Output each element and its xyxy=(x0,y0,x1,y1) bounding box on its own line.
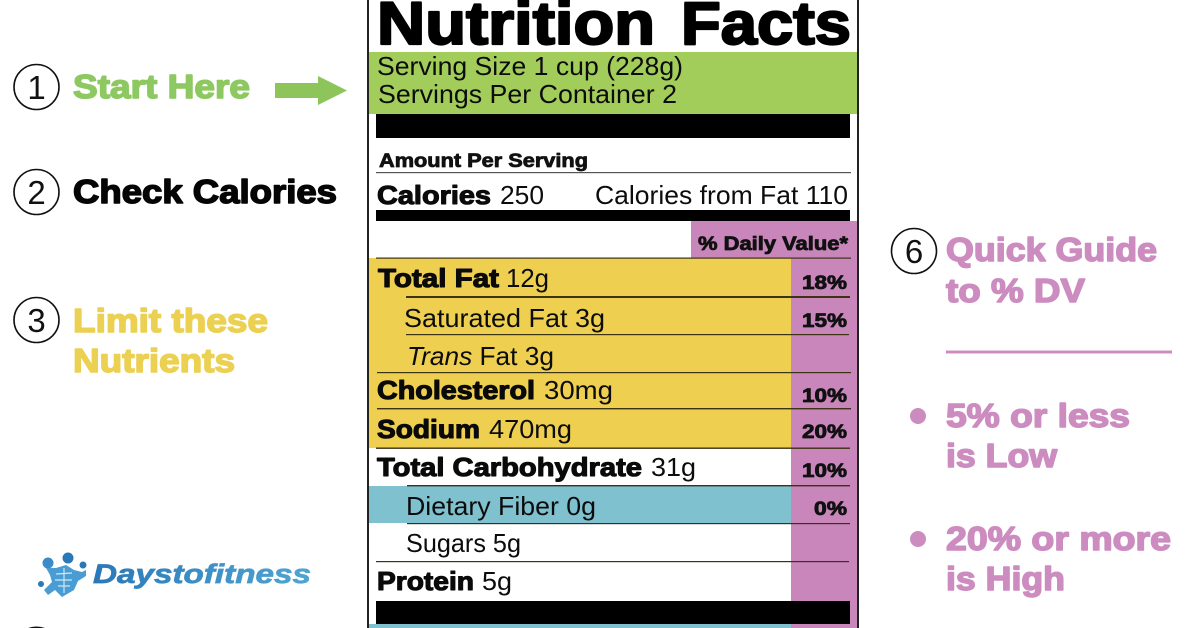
step 3: limit these nutrients: Nutrients xyxy=(73,342,235,379)
vitamin band xyxy=(369,624,791,628)
thick divider xyxy=(376,114,850,138)
fiber band xyxy=(369,486,791,523)
step 1: start here xyxy=(14,64,250,110)
low guidance: 5% or less xyxy=(946,397,1130,434)
quick guide heading: Quick Guide xyxy=(946,231,1157,268)
logo: daystofitness: Daystofitness xyxy=(93,559,311,589)
nutrient rows xyxy=(377,263,696,596)
nutrient rows: Total Carbohydrate xyxy=(377,452,642,482)
step 2: check calories xyxy=(14,170,337,214)
step 3: limit these nutrients: Limit these xyxy=(73,302,268,339)
quick guide heading xyxy=(946,231,1157,309)
nutrient rows: Cholesterol xyxy=(377,375,535,405)
step 3: limit these nutrients xyxy=(14,298,268,379)
amount per serving: Amount Per Serving xyxy=(379,151,588,172)
logo: daystofitness xyxy=(38,552,311,597)
daily value column: % Daily Value* xyxy=(698,234,849,255)
step 3: limit these nutrients: 3 xyxy=(27,302,46,339)
percent values: 15% xyxy=(802,311,847,332)
nutrient rows: Sugars 5g xyxy=(406,528,521,558)
high guidance: is High xyxy=(946,560,1065,597)
row dividers xyxy=(376,258,851,562)
panel: nutrition facts label xyxy=(367,0,859,628)
nutrient rows: Protein xyxy=(377,566,474,596)
step 1: start here: 1 xyxy=(27,69,46,106)
nutrient rows: Total Fat xyxy=(378,263,499,293)
serving size band xyxy=(369,51,857,114)
percent values: 10% xyxy=(802,386,847,407)
label border right xyxy=(857,0,859,628)
panel: quick guide to percent dv xyxy=(892,228,1172,597)
step 2: check calories: Check Calories xyxy=(73,173,337,210)
label border left xyxy=(367,0,369,628)
title xyxy=(377,0,851,57)
percent values: 0% xyxy=(814,499,847,520)
nutrient rows: 12g xyxy=(506,263,549,293)
nutrient rows: 30mg xyxy=(544,375,613,405)
step marker partially cropped xyxy=(28,626,45,628)
step 2: check calories: 2 xyxy=(27,174,46,211)
limit nutrients band xyxy=(369,258,791,448)
nutrient rows: Saturated Fat 3g xyxy=(404,303,605,333)
nutrient rows: 31g xyxy=(651,452,696,482)
thick divider xyxy=(376,210,850,221)
thick divider xyxy=(376,601,850,624)
quick guide heading: to % DV xyxy=(946,272,1085,309)
percent values: 18% xyxy=(802,273,847,294)
calories row xyxy=(377,180,848,210)
nutrient rows: Trans Fat 3g xyxy=(407,341,554,371)
step 6 marker: 6 xyxy=(905,233,923,270)
calories row: Calories xyxy=(377,180,491,210)
low guidance xyxy=(910,397,1130,474)
calories row: 250 xyxy=(500,180,544,210)
daily value column xyxy=(691,221,857,628)
low guidance: is Low xyxy=(946,437,1057,474)
percent values xyxy=(802,273,847,520)
serving size band: Serving Size 1 cup (228g) xyxy=(377,51,683,81)
percent values: 10% xyxy=(802,461,847,482)
high guidance xyxy=(910,520,1171,597)
percent values: 20% xyxy=(802,422,847,443)
arrow to serving size xyxy=(275,76,347,105)
nutrient rows: Sodium xyxy=(377,414,480,444)
nutrient rows: 470mg xyxy=(489,414,572,444)
step 6 marker xyxy=(892,228,936,274)
calories row: Calories from Fat 110 xyxy=(595,180,848,210)
serving size band: Servings Per Container 2 xyxy=(378,79,677,109)
nutrient rows: Dietary Fiber 0g xyxy=(406,491,596,521)
high guidance: 20% or more xyxy=(946,520,1171,557)
step 1: start here: Start Here xyxy=(73,68,250,105)
nutrient rows: 5g xyxy=(482,566,512,596)
